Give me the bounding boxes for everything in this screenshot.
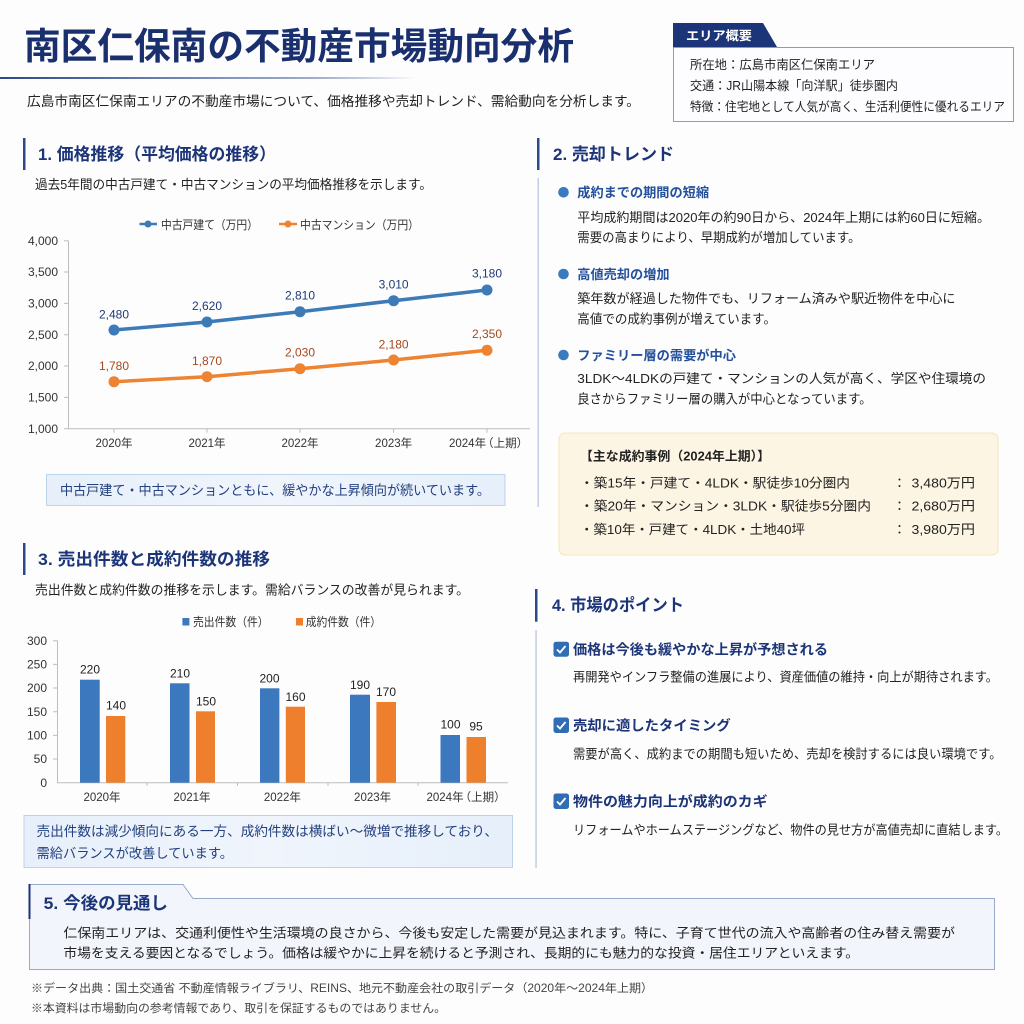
line chart: average price: 2,000 [28, 359, 58, 373]
panel: main contract examples: ・築10年・戸建て・4LDK・土地40坪 [580, 522, 805, 537]
point: selling timing [554, 717, 1002, 761]
panel: outlook: 5. 今後の見通し [44, 893, 168, 913]
text: section 3 description: 売出件数と成約件数の推移を示します。需給バランスの改善が見られます。 [35, 582, 469, 598]
bar chart: listings and contracts: 100 [440, 718, 461, 732]
panel: main contract examples: ： [893, 498, 906, 514]
callout: price trend: 中古戸建て・中古マンションともに、緩やかな上昇傾向が続いています。 [60, 482, 490, 498]
series: condominiums: 2,180 [379, 337, 409, 351]
panel: outlook [28, 884, 994, 970]
panel: main contract examples: ・築20年・マンション・3LDK・駅徒歩5分圏内 [580, 498, 871, 514]
legend: bar chart: 売出件数（件） [193, 614, 269, 629]
point: high-price sales: 高値での成約事例が増えています。 [577, 312, 776, 327]
series: detached houses: 3,180 [472, 266, 502, 280]
point: shorter time to contract [558, 185, 990, 245]
panel: area overview [673, 23, 1014, 122]
line chart: average price: 2021年 [188, 436, 226, 450]
point: property appeal: 物件の魅力向上が成約のカギ [573, 793, 768, 809]
point: family demand [558, 348, 986, 407]
bar chart: listings and contracts: 2024年（上期） [426, 790, 506, 804]
point: family demand: 3LDK～4LDKの戸建て・マンションの人気が高く、学区や住環境の [577, 371, 986, 386]
point: family demand: 良さからファミリー層の購入が中心となっています。 [577, 392, 872, 407]
title: 南区仁保南の不動産市場動向分析 [24, 26, 574, 67]
callout: supply and demand: 需給バランスが改善しています。 [36, 845, 233, 861]
panel: main contract examples [559, 433, 998, 555]
bar chart: listings and contracts: 0 [40, 776, 47, 790]
panel: area overview: 特徴：住宅地として人気が高く、生活利便性に優れるエリア [690, 99, 1005, 114]
heading: section 2 [537, 138, 674, 170]
bar chart: listings and contracts: 2023年 [354, 790, 391, 804]
panel: main contract examples: ： [893, 522, 906, 537]
point: selling timing: 売却に適したタイミング [573, 717, 731, 733]
footnotes: ※データ出典：国土交通省 不動産情報ライブラリ、REINS、地元不動産会社の取引データ（2020年～2024年上期） [31, 981, 653, 995]
bar chart: listings and contracts: 300 [27, 634, 47, 648]
series: detached houses: 3,010 [379, 278, 409, 292]
panel: main contract examples: ・築15年・戸建て・4LDK・駅徒歩10分圏内 [580, 476, 850, 490]
series: condominiums: 2,030 [285, 346, 315, 360]
series: detached houses: 2,620 [192, 299, 222, 313]
line chart: average price: 3,500 [28, 265, 58, 279]
series: condominiums: 1,870 [192, 354, 222, 368]
legend: bar chart [182, 614, 381, 629]
bar chart: listings and contracts: 160 [285, 690, 306, 704]
bar chart: listings and contracts: 95 [469, 720, 483, 734]
footnotes [31, 981, 653, 1015]
panel: main contract examples: ： [893, 476, 906, 490]
line chart: average price: 3,000 [28, 296, 58, 310]
panel: area overview: 所在地：広島市南区仁保南エリア [690, 57, 875, 72]
point: shorter time to contract: 成約までの期間の短縮 [577, 185, 709, 200]
legend: line chart [140, 217, 419, 232]
panel: main contract examples: 3,980万円 [912, 522, 975, 537]
panel: outlook: 市場を支える要因となるでしょう。価格は緩やかに上昇を続けると予測され、長期的にも魅力的な投資・居住エリアといえます。 [63, 946, 859, 961]
panel: market points [554, 641, 1008, 837]
point: price outlook: 価格は今後も緩やかな上昇が予想される [573, 641, 828, 657]
heading: section 4: 4. 市場のポイント [552, 595, 684, 615]
callout: supply and demand: 売出件数は減少傾向にある一方、成約件数は横ばい～微増で推移しており、 [36, 823, 498, 839]
line chart: average price: 1,000 [28, 422, 58, 436]
text: section 1 description: 過去5年間の中古戸建て・中古マンションの平均価格推移を示します。 [35, 177, 432, 192]
line chart: average price: 2020年 [95, 436, 133, 450]
heading: section 1: 1. 価格推移（平均価格の推移） [38, 145, 276, 164]
bar chart: listings and contracts: 140 [106, 699, 126, 713]
point: shorter time to contract: 需要の高まりにより、早期成約が増加しています。 [577, 230, 860, 245]
line chart: average price: 4,000 [28, 234, 58, 248]
panel: outlook: 仁保南エリアは、交通利便性や生活環境の良さから、今後も安定した需要が見込まれます。特に、子育て世代の流入や高齢者の住み替え需要が [63, 926, 955, 941]
point: price outlook [554, 641, 998, 685]
bar chart: listings and contracts: 100 [27, 728, 47, 742]
line chart: average price: 2022年 [281, 436, 319, 450]
heading: section 2: 2. 売却トレンド [553, 144, 674, 164]
bar chart: listings and contracts: 210 [170, 666, 190, 680]
point: selling timing: 需要が高く、成約までの期間も短いため、売却を検討するには良い環境です。 [573, 746, 1002, 761]
panel: sales trend points [558, 185, 990, 407]
point: family demand: ファミリー層の需要が中心 [577, 348, 736, 363]
line chart: average price: 2024年（上期） [449, 436, 528, 450]
series: detached houses: 2,480 [99, 308, 129, 322]
panel: main contract examples: 【主な成約事例（2024年上期）】 [580, 448, 770, 464]
line chart: average price: 2,500 [28, 328, 58, 342]
point: high-price sales: 築年数が経過した物件でも、リフォーム済みや駅近物件を中心に [577, 291, 956, 306]
callout: price trend [46, 474, 505, 506]
line chart: average price [28, 217, 530, 450]
panel: main contract examples: 3,480万円 [912, 476, 975, 490]
series: condominiums: 1,780 [99, 359, 129, 373]
bar chart: listings and contracts: 150 [196, 695, 216, 709]
callout: supply and demand [24, 816, 512, 868]
point: price outlook: 再開発やインフラ整備の進展により、資産価値の維持・向上が期待されます。 [573, 670, 998, 685]
bar chart: listings and contracts: 190 [350, 678, 370, 692]
panel: area overview: 交通：JR山陽本線「向洋駅」徒歩圏内 [690, 78, 898, 93]
bar chart: listings and contracts: 2020年 [83, 790, 121, 804]
panel: main contract examples: 2,680万円 [912, 498, 975, 514]
point: high-price sales: 高値売却の増加 [577, 267, 670, 282]
point: property appeal [554, 793, 1008, 837]
series: condominiums [99, 327, 502, 387]
bar chart: listings and contracts: 170 [376, 685, 396, 699]
panel: area overview: エリア概要 [686, 28, 752, 43]
bar chart: listings and contracts: 150 [27, 705, 47, 719]
bar chart: listings and contracts [27, 614, 508, 804]
point: high-price sales [558, 267, 956, 327]
footnotes: ※本資料は市場動向の参考情報であり、取引を保証するものではありません。 [31, 1001, 446, 1015]
point: shorter time to contract: 平均成約期間は2020年の約90日から、2024年上期には約60日に短縮。 [577, 210, 990, 225]
subtitle: 広島市南区仁保南エリアの不動産市場について、価格推移や売却トレンド、需給動向を分析します。 [27, 94, 640, 109]
bar chart: listings and contracts: 220 [80, 663, 100, 677]
line chart: average price: 1,500 [28, 390, 58, 404]
bar chart: listings and contracts: 200 [27, 681, 47, 695]
series: detached houses: 2,810 [285, 288, 315, 302]
series: condominiums: 2,350 [472, 327, 502, 341]
bar chart: listings and contracts: 250 [27, 658, 47, 672]
series: detached houses [99, 266, 502, 336]
legend: bar chart: 成約件数（件） [306, 614, 381, 629]
bar chart: listings and contracts: 200 [259, 671, 280, 685]
bar chart: listings and contracts: 2022年 [264, 790, 301, 804]
legend: line chart: 中古戸建て（万円） [161, 217, 258, 232]
heading: section 3: 3. 売出件数と成約件数の推移 [38, 549, 270, 569]
line chart: average price: 2023年 [375, 436, 412, 450]
bar chart: listings and contracts: 2021年 [173, 790, 211, 804]
legend: line chart: 中古マンション（万円） [300, 217, 419, 232]
bar chart: listings and contracts: 50 [34, 752, 47, 766]
